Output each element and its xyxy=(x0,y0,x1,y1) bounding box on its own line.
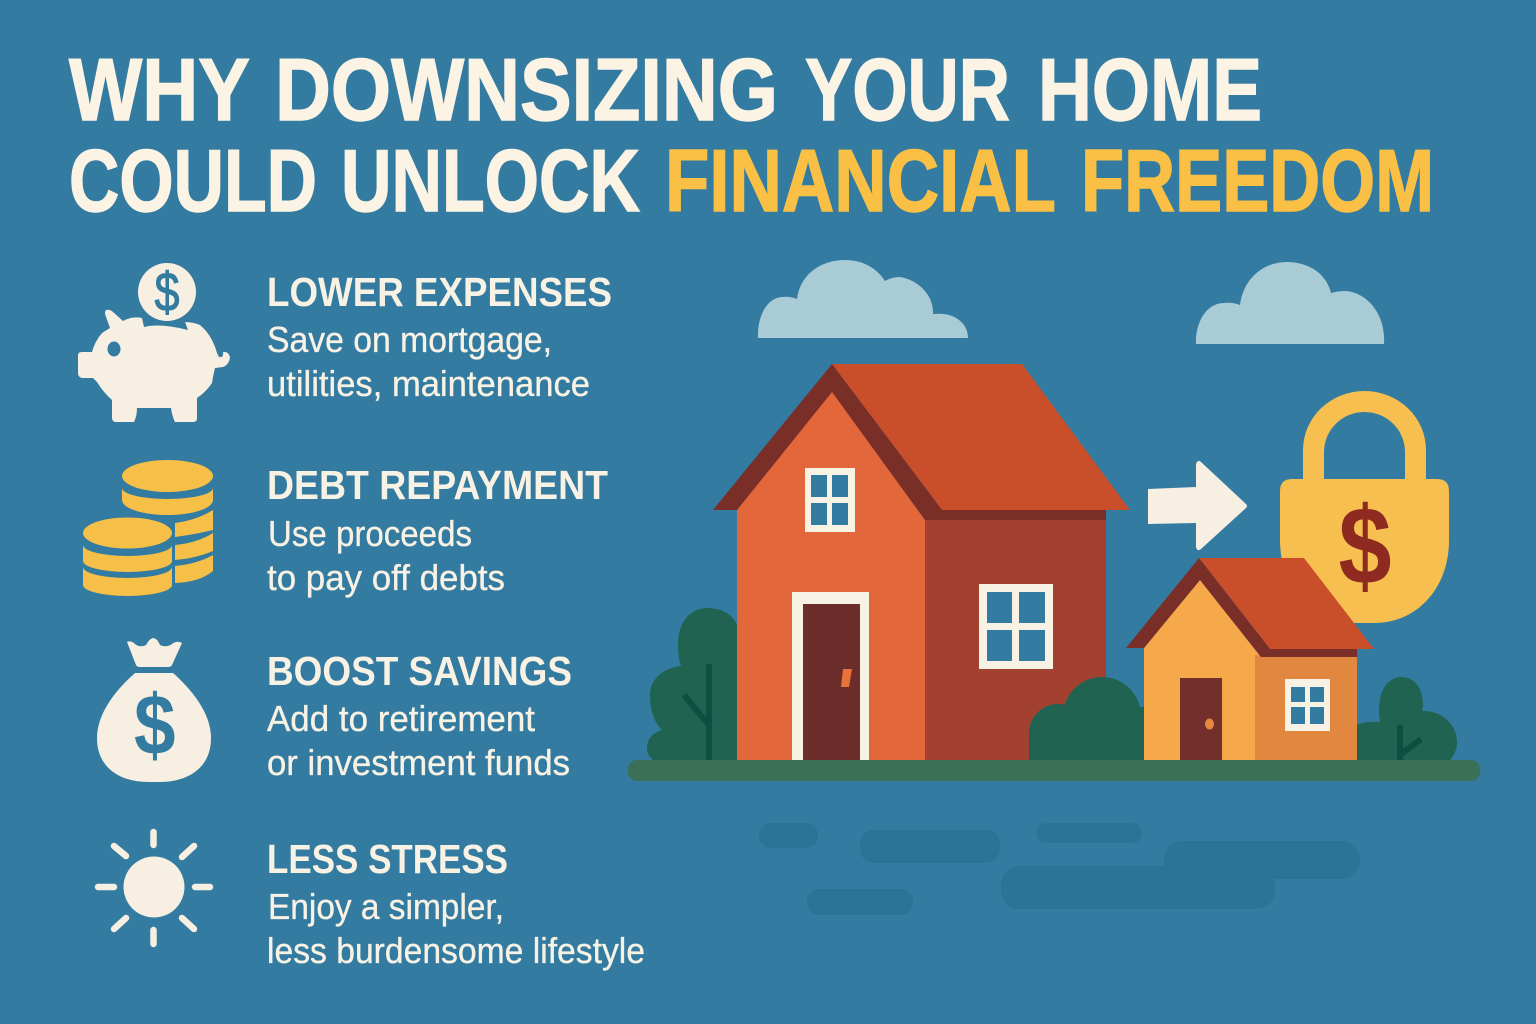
illustration: water reflections xyxy=(759,823,1360,915)
text: boost savings detail xyxy=(267,698,570,783)
icon: sun xyxy=(98,832,210,944)
text: lower expenses detail xyxy=(267,319,590,404)
illustration: padlock with dollar: $ xyxy=(1338,485,1392,608)
title: UNLOCK xyxy=(341,131,640,230)
illustration: small house xyxy=(1126,558,1374,760)
title: DOWNSIZING xyxy=(275,40,778,139)
window: upper xyxy=(805,468,855,532)
heading: less stress: LESS STRESS xyxy=(267,836,508,882)
heading: boost savings: BOOST SAVINGS xyxy=(267,648,572,694)
door xyxy=(792,592,869,760)
panel: boost savings xyxy=(97,638,572,783)
text: less stress detail xyxy=(267,886,645,971)
door xyxy=(1180,678,1222,760)
icon: money bag xyxy=(97,638,211,782)
icon: piggy bank: $ xyxy=(154,261,180,323)
panel: debt repayment xyxy=(83,460,608,598)
text: lower expenses detail: Save on mortgage, xyxy=(267,319,552,360)
illustration: large house xyxy=(713,364,1130,760)
text: boost savings detail: Add to retirement xyxy=(267,698,535,739)
ground strip xyxy=(628,760,1480,781)
title: HOME xyxy=(1038,40,1262,139)
icon: money bag: $ xyxy=(134,678,176,773)
window: lower xyxy=(979,584,1053,669)
text: less stress detail: less burdensome lifestyle xyxy=(267,930,645,971)
text: lower expenses detail: utilities, maintenance xyxy=(267,363,590,404)
heading: lower expenses: LOWER EXPENSES xyxy=(267,269,612,315)
window xyxy=(1285,679,1330,731)
text: boost savings detail: or investment funds xyxy=(267,742,570,783)
title xyxy=(69,40,1434,230)
illustration: middle bush xyxy=(1029,677,1144,762)
title: FINANCIAL xyxy=(665,131,1056,230)
heading: debt repayment: DEBT REPAYMENT xyxy=(267,462,608,508)
text: less stress detail: Enjoy a simpler, xyxy=(268,886,504,927)
illustration: clouds xyxy=(758,260,1384,344)
title: YOUR xyxy=(805,40,1010,139)
arrow xyxy=(1148,461,1247,550)
title: WHY xyxy=(69,40,250,139)
text: debt repayment detail xyxy=(267,513,505,598)
illustration: padlock with dollar xyxy=(1280,391,1449,623)
text: debt repayment detail: Use proceeds xyxy=(268,513,472,554)
illustration: right bush xyxy=(1357,677,1457,760)
illustration: left tree xyxy=(647,608,737,760)
title: COULD xyxy=(69,131,317,230)
panel: less stress xyxy=(98,832,645,971)
panel: lower expenses xyxy=(78,261,612,422)
title: FREEDOM xyxy=(1081,131,1434,230)
icon: piggy bank xyxy=(78,261,230,422)
text: debt repayment detail: to pay off debts xyxy=(267,557,505,598)
icon: coin stacks xyxy=(83,460,213,596)
